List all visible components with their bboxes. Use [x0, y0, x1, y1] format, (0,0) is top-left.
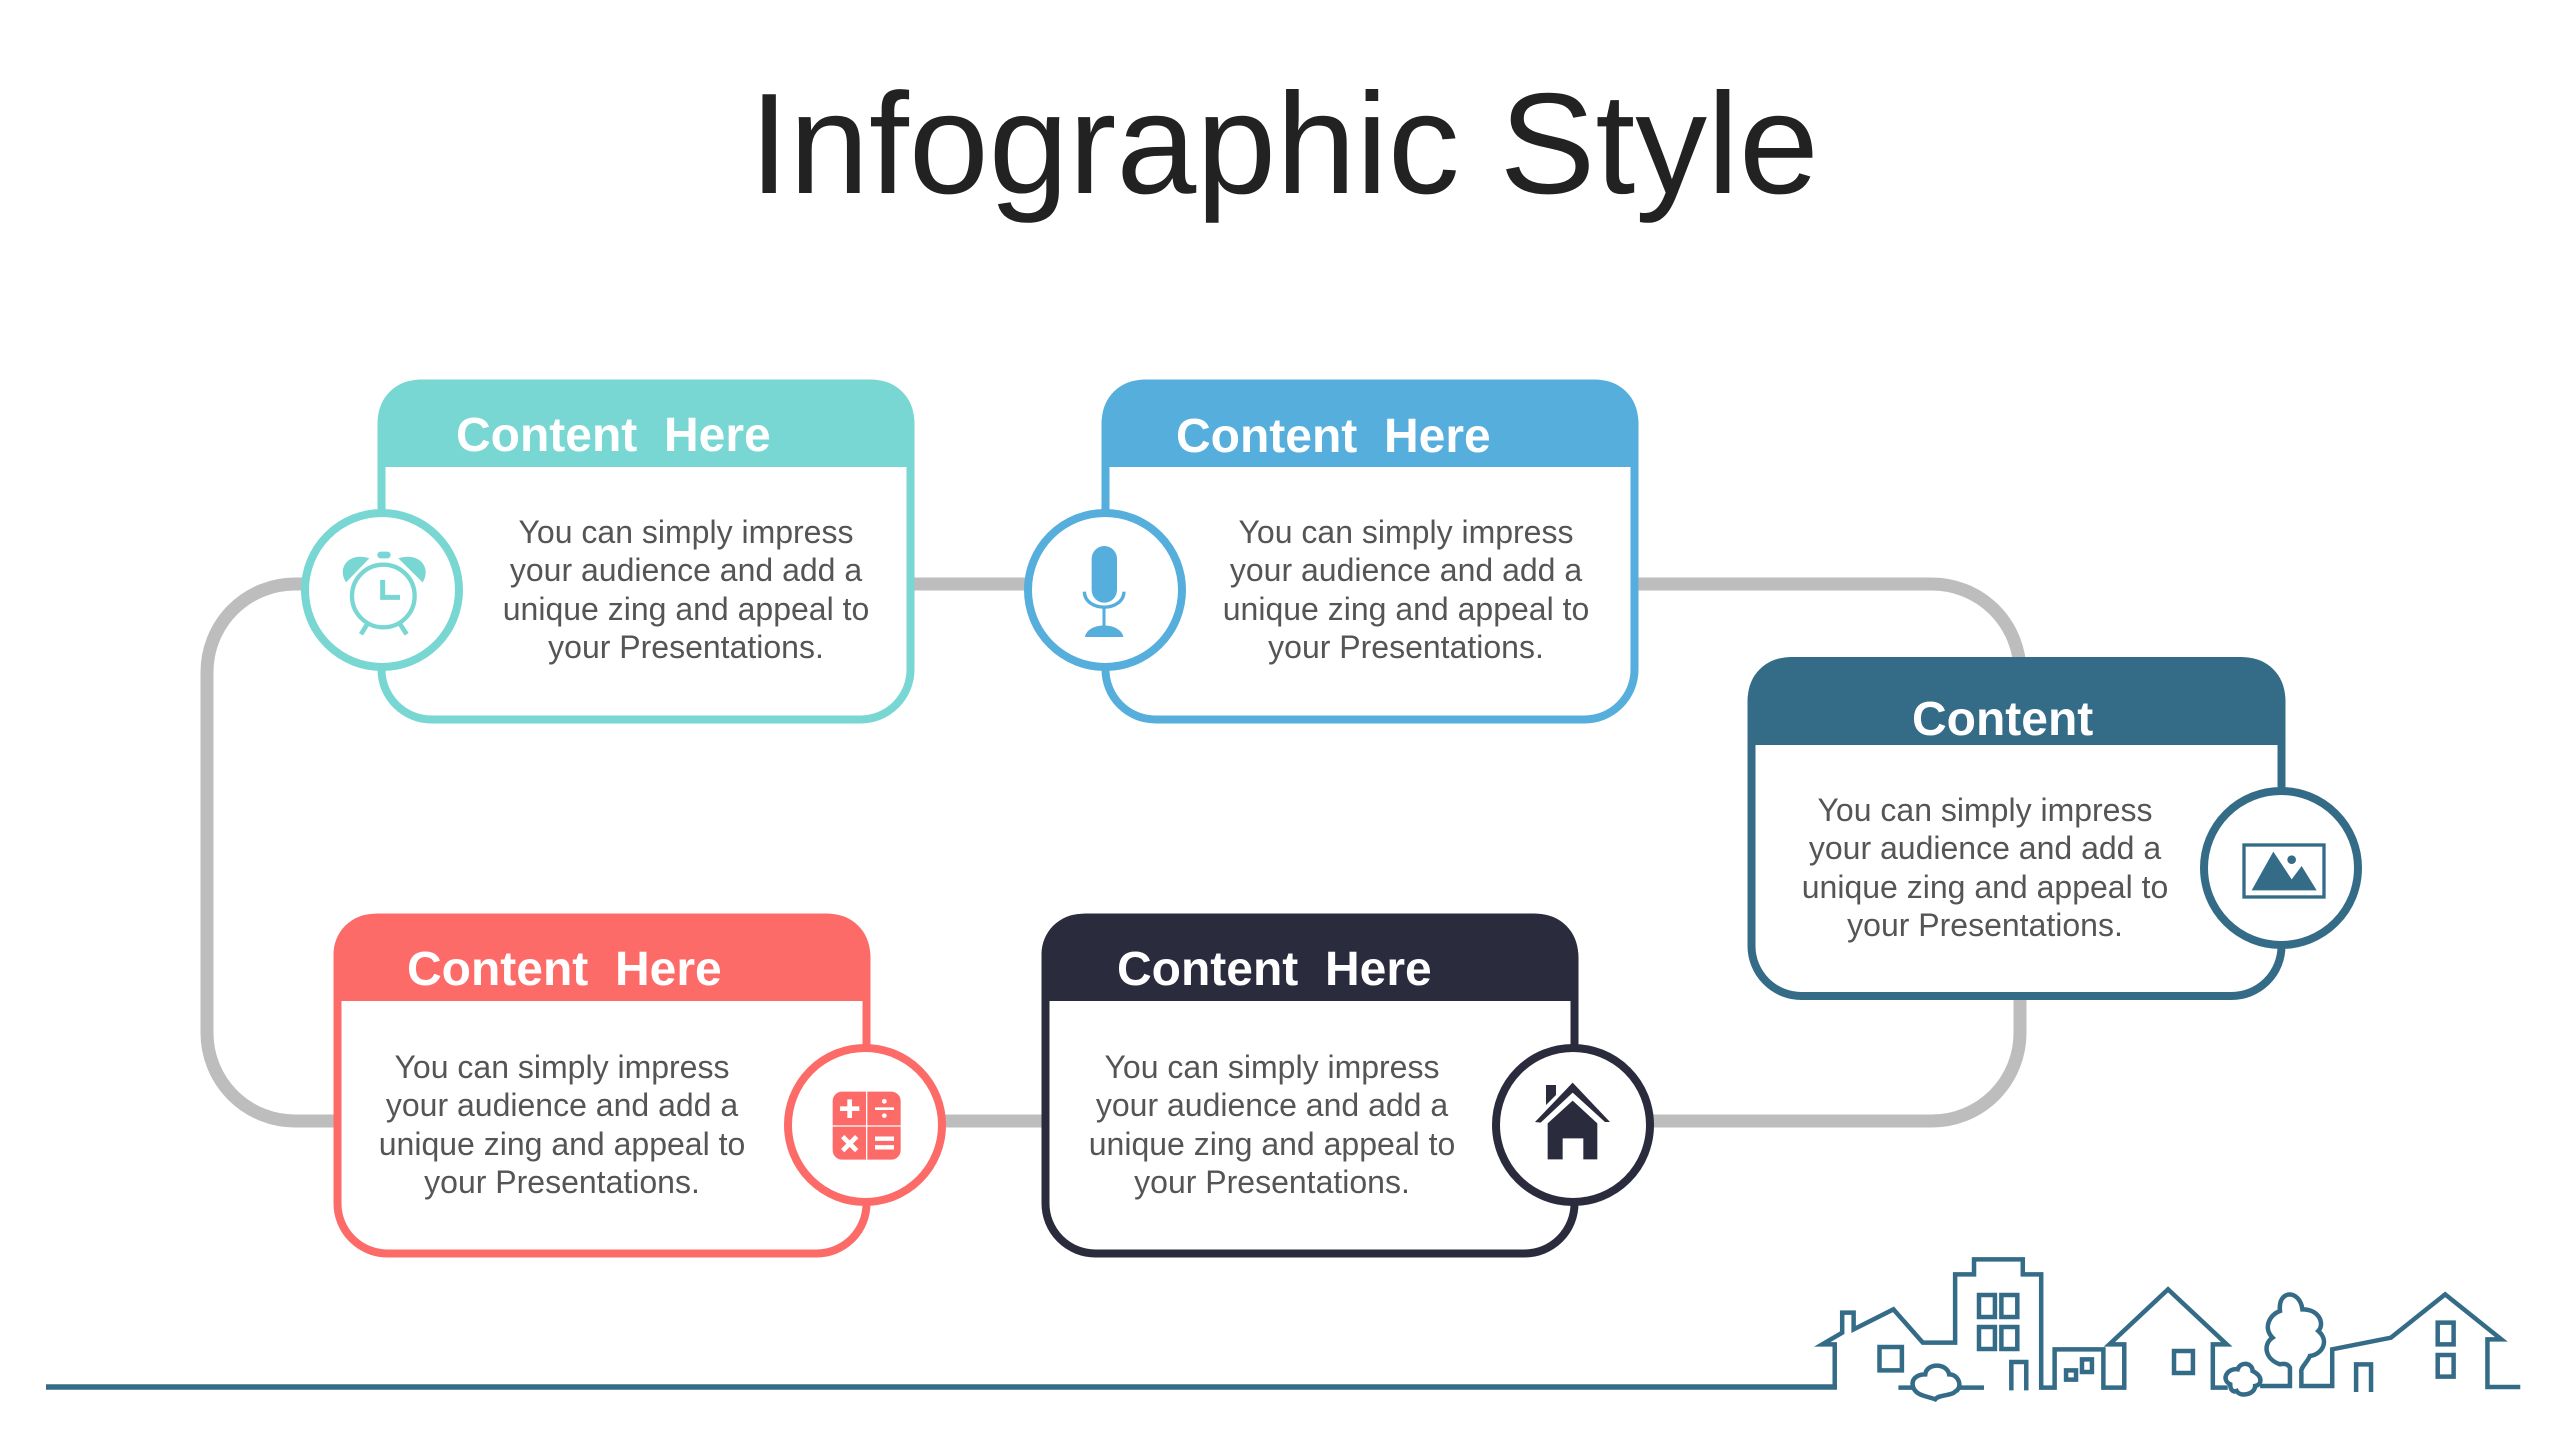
connector path [207, 584, 2020, 1121]
icon: picture [2204, 791, 2358, 945]
card header [1102, 380, 1638, 467]
body text: You can simply impress [1818, 792, 2152, 828]
body text: your Presentations. [424, 1164, 700, 1200]
body text: unique zing and appeal to [1223, 591, 1589, 627]
panel: dark teal card [1748, 658, 2358, 996]
card header [1042, 914, 1578, 1001]
icon: microphone [1028, 513, 1182, 667]
panel: blue card [1028, 380, 1638, 720]
heading: Content Here [1117, 943, 1432, 996]
heading: Content Here [1176, 410, 1491, 463]
body text: unique zing and appeal to [503, 591, 869, 627]
body text: unique zing and appeal to [1802, 869, 2168, 905]
body text: unique zing and appeal to [379, 1126, 745, 1162]
body text: unique zing and appeal to [1089, 1126, 1455, 1162]
panel: coral card [334, 914, 942, 1254]
heading: Content Here [407, 943, 722, 996]
body text: your audience and add a [510, 552, 862, 588]
card header [334, 914, 870, 1001]
body text: your audience and add a [1809, 830, 2161, 866]
panel: teal card [305, 380, 914, 720]
card outline [382, 384, 910, 720]
body text: your Presentations. [1847, 907, 2123, 943]
heading: Content Here [456, 409, 771, 462]
heading: Content [1912, 693, 2093, 746]
body text: your audience and add a [386, 1087, 738, 1123]
icon: house [1496, 1048, 1650, 1202]
card outline [1106, 384, 1634, 720]
ground line [46, 1384, 1837, 1390]
body text: your audience and add a [1230, 552, 1582, 588]
icon: alarm clock [305, 513, 459, 667]
card header [1748, 658, 2285, 745]
title: Infographic Style [749, 64, 1819, 224]
card outline [338, 918, 866, 1254]
panel: navy card [1042, 914, 1650, 1254]
body text: You can simply impress [519, 514, 853, 550]
body text: your audience and add a [1096, 1087, 1448, 1123]
icon: town skyline [1822, 1259, 2520, 1399]
body text: your Presentations. [1134, 1164, 1410, 1200]
body text: You can simply impress [1239, 514, 1573, 550]
body text: You can simply impress [1105, 1049, 1439, 1085]
body text: your Presentations. [548, 629, 824, 665]
body text: your Presentations. [1268, 629, 1544, 665]
card header [378, 380, 914, 467]
card outline [1046, 918, 1574, 1254]
body text: You can simply impress [395, 1049, 729, 1085]
card outline [1752, 661, 2282, 996]
icon: calculator [788, 1048, 942, 1202]
